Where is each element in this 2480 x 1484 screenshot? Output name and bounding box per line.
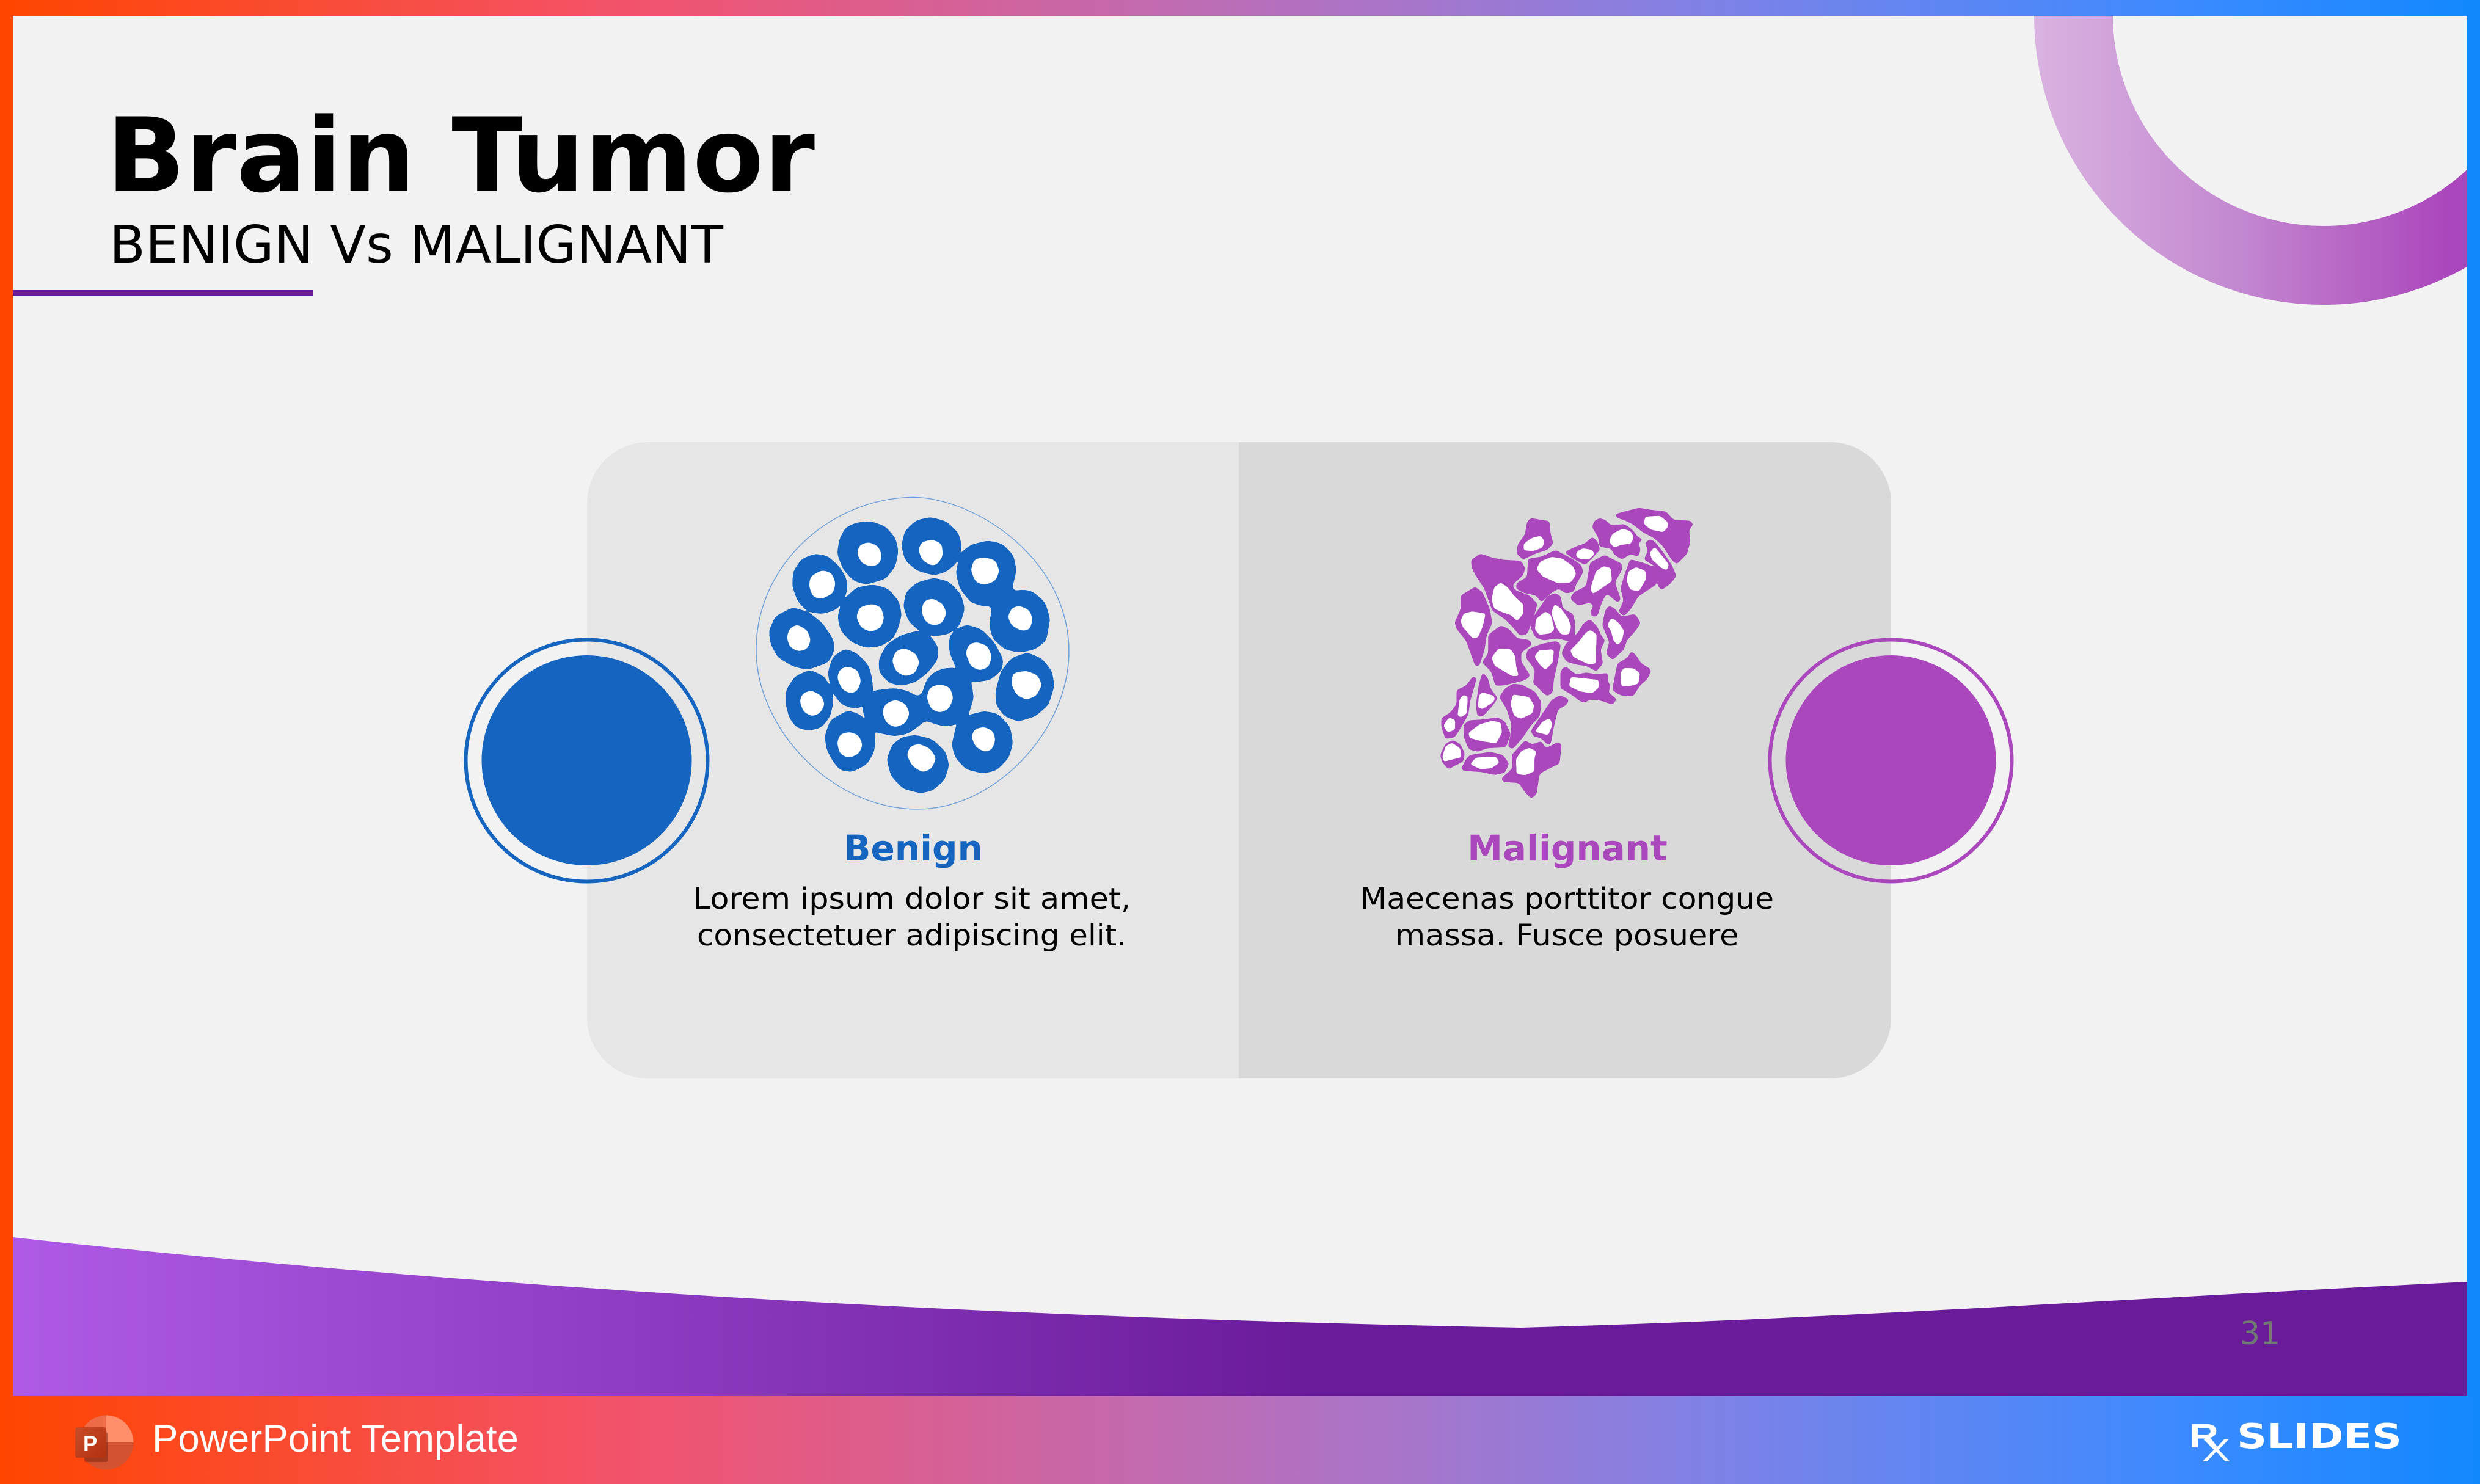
benign cell bodies (769, 517, 1054, 793)
heading: malignant: Malignant (1467, 827, 1668, 869)
malignant cell nuclei (1442, 515, 1669, 776)
icon: PowerPoint logo (75, 1416, 133, 1469)
benign cell nuclei (787, 539, 1042, 773)
logo: Rx Slides: X (2201, 1433, 2231, 1469)
title underline (13, 290, 313, 296)
icon: benign tumor cells (756, 497, 1069, 809)
footer gradient bar (0, 1396, 2480, 1484)
body: benign description: Lorem ipsum dolor sit amet, (693, 882, 1131, 916)
icon: malignant tumor cells (1440, 507, 1694, 799)
icon: PowerPoint logo: P (83, 1432, 97, 1456)
body: benign description: consectetuer adipiscing elit. (697, 918, 1126, 953)
title: Brain Tumor (106, 96, 815, 216)
tumor capsule outline (756, 497, 1069, 809)
logo: Rx Slides (2189, 1416, 2402, 1469)
body: malignant description: massa. Fusce posuere (1395, 918, 1738, 953)
malignant cell bodies (1440, 507, 1694, 799)
page number: 31 (2240, 1315, 2280, 1352)
text block: benign (693, 827, 1131, 953)
heading: benign: Benign (844, 827, 983, 869)
badge: benign circle (465, 640, 707, 882)
subtitle: BENIGN Vs MALIGNANT (109, 215, 724, 275)
body: malignant description: Maecenas porttitor congue (1360, 882, 1774, 916)
left frame bar (0, 0, 13, 1484)
top gradient bar (0, 0, 2480, 16)
decorative ring top right (2073, 0, 2480, 265)
right frame bar (2467, 0, 2480, 1484)
panel: benign side (587, 442, 1239, 1078)
logo: Rx Slides: SLIDES (2237, 1417, 2402, 1457)
logo: Rx Slides: R (2189, 1416, 2219, 1455)
text block: malignant (1360, 827, 1774, 953)
footer label: PowerPoint Template (152, 1417, 519, 1460)
panel: comparison card (587, 442, 1891, 1078)
bottom wave (13, 1237, 2467, 1399)
badge: malignant circle (1770, 640, 2012, 882)
panel: malignant side (1239, 442, 1891, 1078)
